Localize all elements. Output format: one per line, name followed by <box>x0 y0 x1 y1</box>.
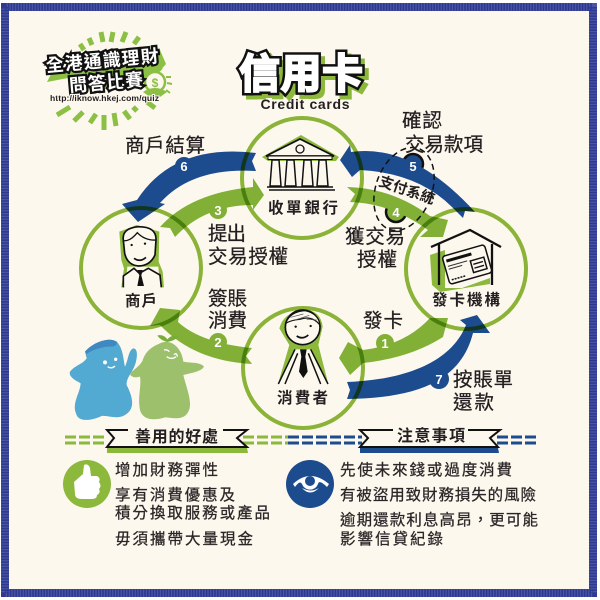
label: acquiring bank: 收單銀行 <box>268 199 338 217</box>
title: 信用卡 <box>239 51 363 97</box>
arrow 1: green, issue card: 1 <box>381 336 389 351</box>
arrow 7: blue, pay bill <box>347 315 490 399</box>
arrow 1: green, issue card <box>339 318 448 375</box>
arrow 5: blue, confirm transaction: 5 <box>409 159 417 174</box>
text block: benefits: 毋須攜帶大量現金 <box>115 530 253 548</box>
arrow 7: blue, pay bill: 7 <box>435 372 443 387</box>
title: Credit cards <box>260 96 350 112</box>
arrow 4: green, obtain authorisation: 4 <box>392 205 400 220</box>
label: payment system with dashed loop: 支付系統 <box>377 172 438 208</box>
ribbon: cautions heading <box>360 426 500 453</box>
step label 2: 消費 <box>208 310 247 332</box>
label: payment system with dashed loop <box>363 139 445 239</box>
label: issuer: 發卡機構 <box>432 290 500 309</box>
ring: issuer <box>406 209 526 329</box>
ring: merchant <box>81 208 201 328</box>
dashes: section divider <box>65 437 537 443</box>
step label 6: 商戶結算 <box>125 135 205 157</box>
step label 5 <box>402 110 483 156</box>
ring: acquiring bank <box>242 118 362 238</box>
label: consumer: 消費者 <box>277 389 328 407</box>
text block: benefits: 增加財務彈性 <box>115 461 218 479</box>
step label 3 <box>208 223 288 268</box>
arrow 3: green, request authorisation: 3 <box>214 203 222 218</box>
ribbon: cautions heading: 注意事項 <box>397 426 465 445</box>
step label 2 <box>208 288 247 332</box>
text block: benefits: 積分換取服務或產品 <box>115 504 270 522</box>
text block: cautions: 影響信貸紀錄 <box>340 530 443 548</box>
step label 2: 簽賬 <box>208 288 247 310</box>
text block: cautions: 先使未來錢或過度消費 <box>340 461 512 479</box>
badge heading: 問答比賽 <box>68 69 144 96</box>
step label 1: 發卡 <box>363 310 403 332</box>
arrow 2: green, sign for purchase: 2 <box>214 335 222 350</box>
badge: quiz promotion: $ <box>152 76 159 90</box>
step label 3: 交易授權 <box>208 246 288 268</box>
step label 7 <box>453 369 513 414</box>
mascot: green <box>130 335 204 419</box>
badge: quiz promotion <box>45 32 172 130</box>
step label 4 <box>345 226 405 271</box>
arrow 3: green, request authorisation <box>160 178 264 237</box>
step label 5: 交易款項 <box>405 134 483 156</box>
step label 7: 按賬單 <box>453 369 513 391</box>
icon: consumer person <box>278 309 328 384</box>
icon: thumbs up <box>63 460 111 508</box>
text block: cautions <box>340 461 538 548</box>
text block: benefits <box>115 461 270 548</box>
ribbon: benefits heading: 善用的好處 <box>135 427 218 446</box>
arrow 6: blue, settlement to merchant <box>122 152 256 222</box>
badge heading <box>45 46 161 98</box>
step label 4: 授權 <box>357 249 397 271</box>
arrow 6: blue, settlement to merchant: 6 <box>180 159 188 174</box>
step label 5: 確認 <box>402 110 442 132</box>
step label 7: 還款 <box>453 392 494 414</box>
badge: quiz promotion: http://iknow.hkej.com/quiz <box>50 93 159 103</box>
icon: issuer house and card <box>430 230 501 292</box>
text block: benefits: 享有消費優惠及 <box>115 486 235 504</box>
icon: merchant person <box>119 225 164 287</box>
icon: eye <box>286 460 334 508</box>
text block: cautions: 有被盜用致財務損失的風險 <box>340 486 536 504</box>
ring: consumer <box>243 308 363 428</box>
mascot: blue <box>70 340 137 420</box>
icon: bank <box>262 135 339 190</box>
step label 4: 獲交易 <box>345 226 405 248</box>
step label 3: 提出 <box>208 223 246 245</box>
label: merchant: 商戶 <box>125 291 157 310</box>
title: 信用卡 <box>243 55 367 101</box>
arrow 4: green, obtain authorisation <box>347 187 448 237</box>
arrow 2: green, sign for purchase <box>150 308 252 364</box>
ribbon: benefits heading <box>107 427 248 453</box>
badge heading: 全港通識理財 <box>45 46 159 76</box>
text block: cautions: 逾期還款利息高昂，更可能 <box>340 511 538 529</box>
title: 信用卡 <box>239 51 363 97</box>
arrow 5: blue, confirm transaction <box>340 145 475 218</box>
